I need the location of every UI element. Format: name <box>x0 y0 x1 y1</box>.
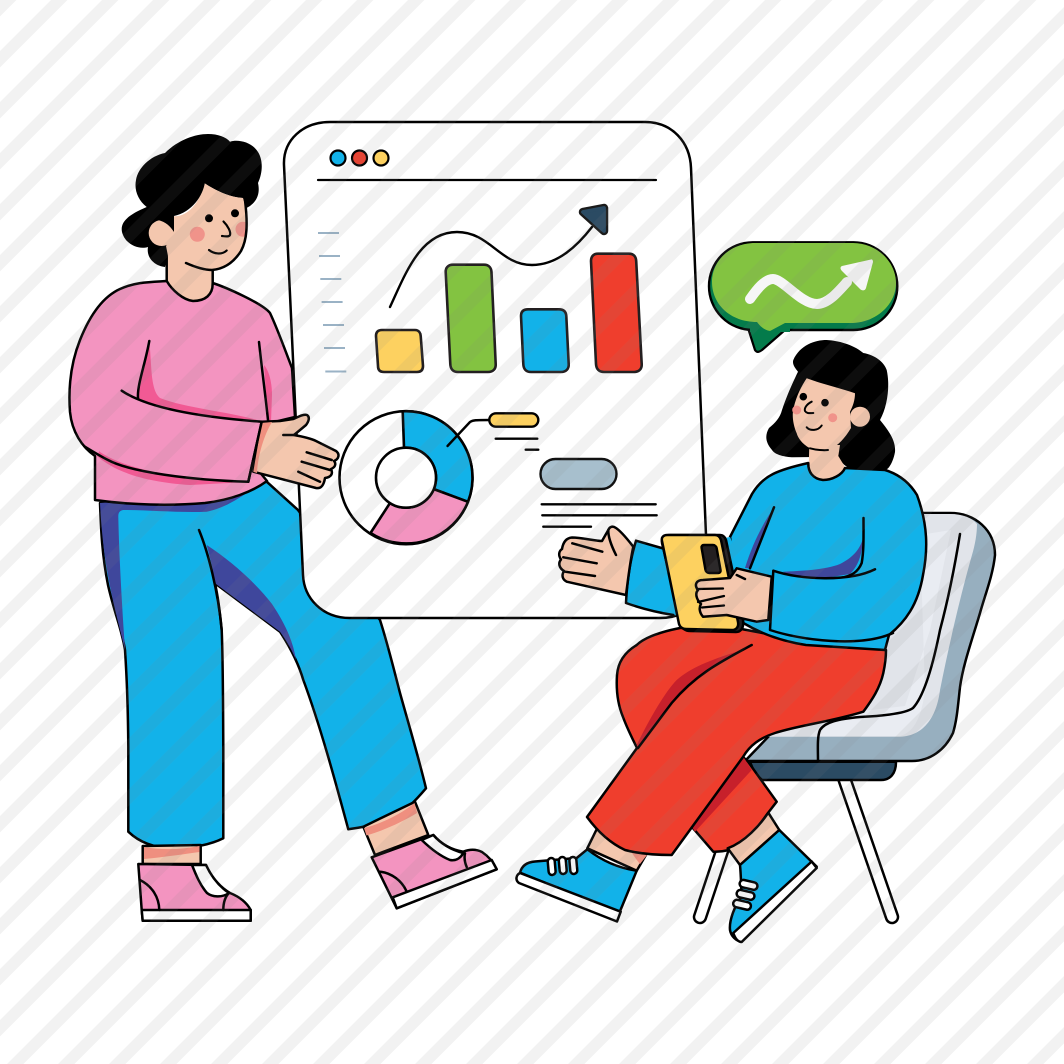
ankle <box>143 845 201 864</box>
woman's hair <box>766 340 895 472</box>
woman's back shoe <box>730 830 817 942</box>
ankle <box>363 802 428 855</box>
woman's sweater <box>626 463 926 650</box>
bubble face <box>712 243 896 331</box>
man's sweater <box>69 281 295 505</box>
woman's neck <box>808 445 845 482</box>
woman's back foot ankle <box>728 813 779 865</box>
man's standing foot <box>138 845 251 921</box>
chair seam <box>818 534 960 761</box>
man <box>69 134 338 505</box>
chair seat base <box>750 762 896 780</box>
man's neck <box>167 250 213 303</box>
board frame <box>284 122 707 618</box>
woman's facial features <box>792 393 837 450</box>
bubble tail <box>748 328 785 352</box>
speech bubble <box>709 242 897 352</box>
woman's right sleeve <box>770 569 905 642</box>
man's face <box>166 183 247 270</box>
man's facial features <box>186 200 247 270</box>
chair shell <box>745 513 995 761</box>
shoe <box>372 835 497 908</box>
dashboard board <box>284 122 707 618</box>
shoe <box>138 864 251 921</box>
bar chart <box>376 254 642 372</box>
woman's ear <box>850 407 870 427</box>
window dots <box>330 150 388 166</box>
man's hair <box>122 134 262 267</box>
header rule <box>318 179 656 181</box>
woman's right hand <box>696 568 772 622</box>
woman's face <box>793 378 855 450</box>
trend line <box>390 227 592 307</box>
donut callout <box>448 413 538 450</box>
chair cushion <box>760 514 977 737</box>
donut chart <box>340 411 473 544</box>
chair front leg <box>700 845 724 917</box>
axis ticks <box>318 233 346 372</box>
woman <box>516 340 926 942</box>
man's ear <box>149 220 175 246</box>
bubble arrow <box>750 259 873 304</box>
chair <box>700 513 995 917</box>
bubble dark base <box>709 242 897 330</box>
woman's left hand lines <box>563 530 616 576</box>
man's cheeks <box>190 222 250 242</box>
woman's left hand <box>559 527 633 595</box>
woman's trousers <box>587 625 886 855</box>
man's hair fringe <box>158 182 205 232</box>
tablet <box>662 535 743 632</box>
chair back leg <box>843 775 892 917</box>
woman's front foot <box>516 826 650 922</box>
grey label pill and text lines <box>540 459 657 527</box>
man's trousers <box>100 482 426 848</box>
woman's back leg <box>692 757 777 852</box>
trend arrowhead <box>583 208 604 231</box>
man's forward foot <box>363 802 497 908</box>
man's hand <box>248 415 338 488</box>
